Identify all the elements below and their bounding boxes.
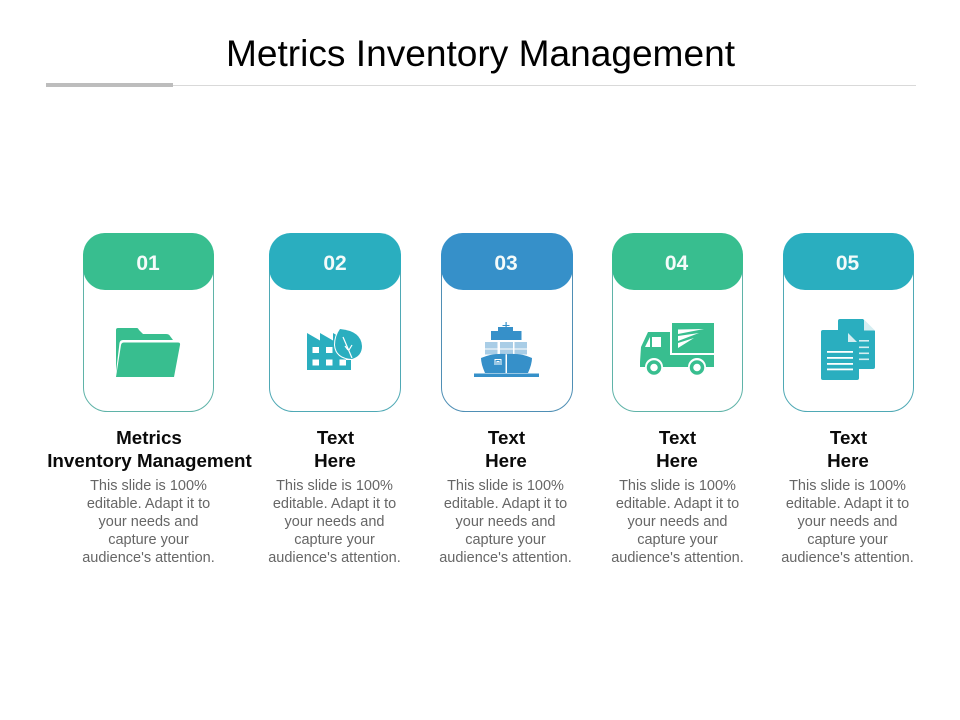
heading 01 xyxy=(47,427,253,471)
body text 04: audience's attention. xyxy=(611,550,744,566)
body text 05: This slide is 100% xyxy=(789,478,906,494)
number badge 01 xyxy=(83,233,214,290)
body text 05: audience's attention. xyxy=(781,550,914,566)
heading 02 xyxy=(314,427,356,471)
card outline 05 xyxy=(784,234,914,412)
panel: step 05 xyxy=(781,233,914,566)
number badge 05: 05 xyxy=(836,252,859,275)
body text 04: This slide is 100% xyxy=(619,478,736,494)
body text 02 xyxy=(268,478,401,566)
heading 05 xyxy=(827,427,869,471)
icon: documents xyxy=(821,319,875,380)
panel: step 02 xyxy=(268,233,401,566)
heading 03: Text xyxy=(488,427,526,448)
number badge 01: 01 xyxy=(136,252,160,275)
card outline 03 xyxy=(442,234,572,412)
title underline xyxy=(46,83,916,87)
panel: step 04 xyxy=(611,233,744,566)
title: Metrics Inventory Management xyxy=(226,32,736,74)
body text 01: audience's attention. xyxy=(82,550,215,566)
body text 01: editable. Adapt it to xyxy=(87,496,210,512)
body text 03 xyxy=(439,478,572,566)
icon: delivery truck xyxy=(640,323,714,376)
card outline 02 xyxy=(270,234,400,412)
icon: folder xyxy=(116,328,180,377)
heading 02: Here xyxy=(314,450,356,471)
heading 01: Metrics xyxy=(116,427,182,448)
body text 04 xyxy=(611,478,744,566)
heading 01: Inventory Management xyxy=(47,450,253,471)
panel: step 01 xyxy=(47,233,253,566)
body text 02: audience's attention. xyxy=(268,550,401,566)
body text 01: your needs and xyxy=(99,514,198,530)
heading 03 xyxy=(485,427,527,471)
body text 05: your needs and xyxy=(798,514,897,530)
body text 03: capture your xyxy=(465,532,546,548)
body text 03: editable. Adapt it to xyxy=(444,496,567,512)
number badge 04 xyxy=(612,233,743,290)
panel: step 03 xyxy=(439,233,573,566)
number badge 04: 04 xyxy=(665,252,688,275)
card outline 04 xyxy=(612,234,742,412)
body text 02: editable. Adapt it to xyxy=(273,496,396,512)
body text 01 xyxy=(82,478,215,566)
body text 03: This slide is 100% xyxy=(447,478,564,494)
body text 05: capture your xyxy=(807,532,888,548)
heading 04: Text xyxy=(659,427,697,448)
body text 01: This slide is 100% xyxy=(90,478,207,494)
heading 04: Here xyxy=(656,450,698,471)
icon: container ship xyxy=(474,322,539,377)
body text 04: capture your xyxy=(637,532,718,548)
body text 05 xyxy=(781,478,914,566)
number badge 02: 02 xyxy=(323,252,347,275)
body text 03: audience's attention. xyxy=(439,550,572,566)
heading 03: Here xyxy=(485,450,527,471)
card outline 01 xyxy=(84,234,214,412)
body text 02: your needs and xyxy=(285,514,384,530)
number badge 02 xyxy=(269,233,401,290)
heading 05: Text xyxy=(830,427,868,448)
number badge 05 xyxy=(783,233,914,290)
number badge 03 xyxy=(441,233,573,290)
icon: factory with leaf xyxy=(307,329,362,370)
body text 02: capture your xyxy=(294,532,375,548)
number badge 03: 03 xyxy=(494,252,518,275)
body text 05: editable. Adapt it to xyxy=(786,496,909,512)
body text 02: This slide is 100% xyxy=(276,478,393,494)
heading 02: Text xyxy=(317,427,355,448)
heading 05: Here xyxy=(827,450,869,471)
body text 03: your needs and xyxy=(456,514,555,530)
heading 04 xyxy=(656,427,698,471)
body text 04: editable. Adapt it to xyxy=(616,496,739,512)
body text 04: your needs and xyxy=(628,514,727,530)
body text 01: capture your xyxy=(108,532,189,548)
